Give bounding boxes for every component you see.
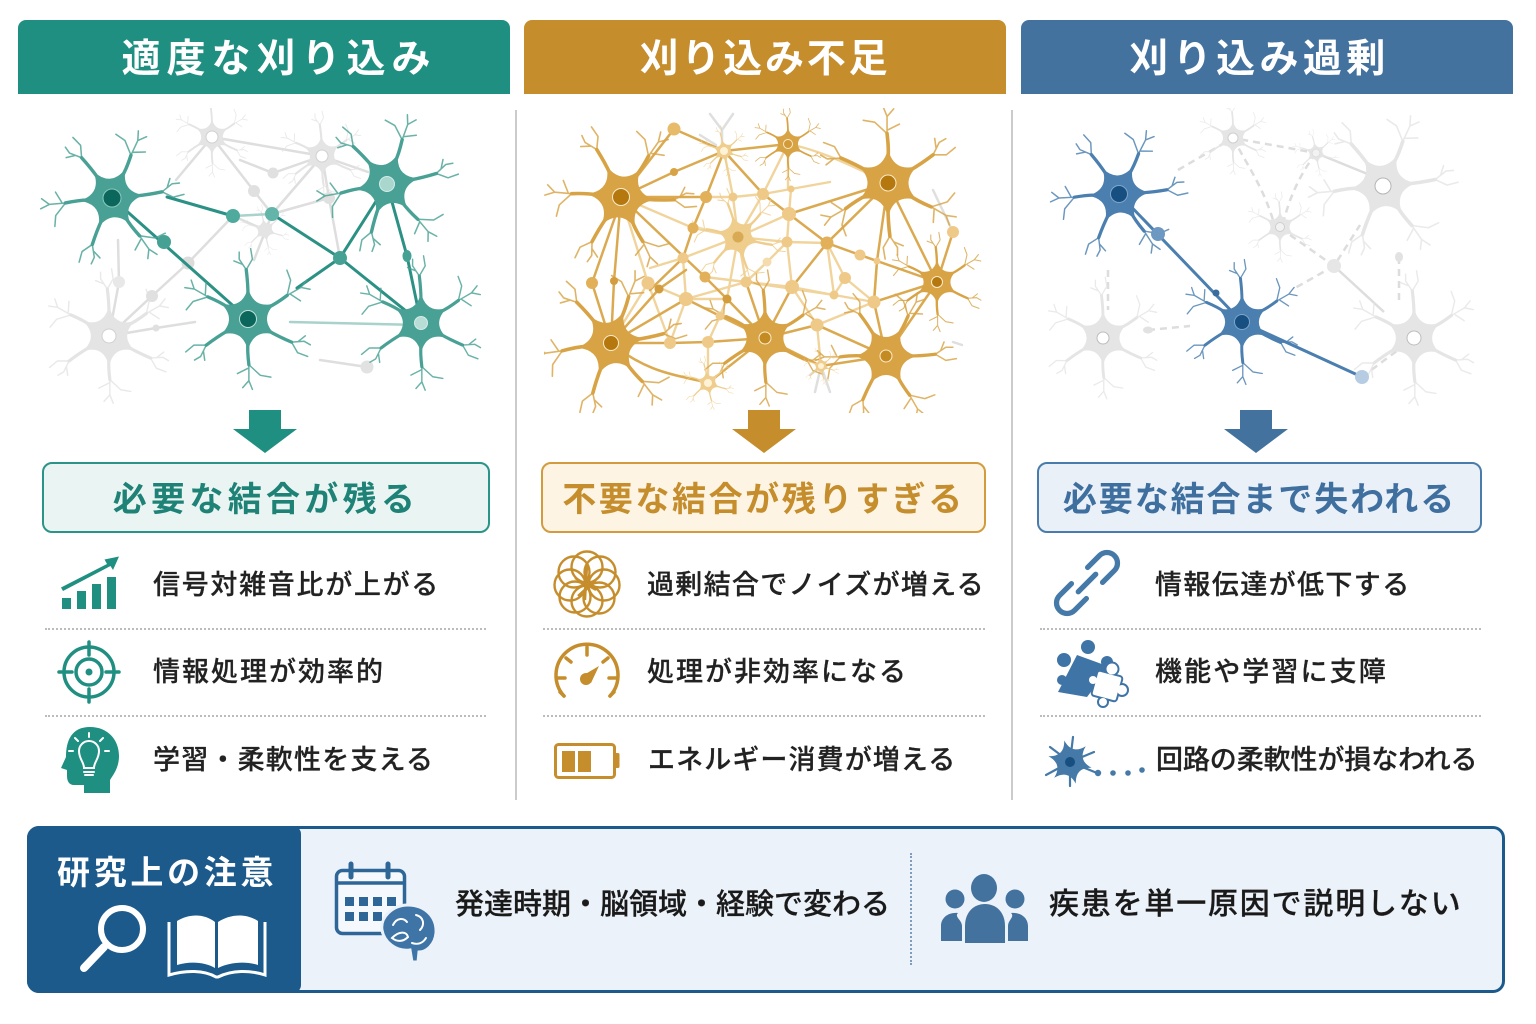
icon: people (941, 874, 1028, 943)
light neurons (673, 118, 846, 417)
sidebar: research notes (27, 826, 301, 993)
list item: energy (554, 743, 956, 779)
icon: puzzle (1057, 640, 1129, 708)
text: 情報処理が効率的 (153, 657, 385, 687)
connection nodes (586, 122, 959, 349)
text: 学習・柔軟性を支える (153, 745, 434, 775)
icon: magnifier and book (80, 905, 266, 978)
icon: target (57, 640, 121, 704)
arrow down (233, 410, 297, 453)
text: 信号対雑音比が上がる (153, 570, 440, 600)
text: 機能や学習に支障 (1155, 657, 1388, 687)
neurons (525, 77, 1005, 429)
text: 回路の柔軟性が損なわれる (1156, 745, 1477, 775)
neural network: balanced connections (40, 108, 482, 404)
panel: appropriate pruning (18, 20, 510, 793)
list item: inefficient processing (554, 642, 908, 698)
text: 情報伝達が低下する (1155, 570, 1411, 600)
active neurons (1047, 120, 1369, 405)
heading: appropriate pruning (18, 20, 510, 94)
panel: research notes (27, 826, 1505, 993)
icon: calendar and brain (334, 862, 435, 960)
item: developmental stage (334, 862, 890, 960)
list item: signal to noise (61, 556, 440, 609)
inactive connections (109, 137, 368, 367)
inactive neurons (18, 81, 383, 426)
result banner (42, 462, 490, 533)
icon: neuron with broken axon (1044, 736, 1145, 788)
text: 疾患を単一原因で説明しない (1049, 888, 1462, 921)
panel: excessive pruning (1021, 20, 1513, 788)
active neurons (34, 99, 514, 413)
light connections (611, 144, 888, 383)
icon: tangled circles (553, 550, 621, 618)
heading: insufficient pruning (524, 20, 1006, 94)
text: 発達時期・脳領域・経験で変わる (455, 889, 890, 921)
result banner: 必要な結合まで失われる (1063, 481, 1456, 519)
icon: broken chain (1054, 550, 1120, 616)
icon: head with light bulb (61, 727, 119, 793)
text: エネルギー消費が増える (648, 745, 956, 775)
neural network: lost connections (1048, 108, 1474, 406)
active connections (112, 184, 421, 325)
icon: battery (554, 743, 620, 779)
list item: noise (553, 550, 985, 618)
text: 過剰結合でノイズが増える (647, 570, 985, 600)
heading: insufficient pruning: 刈り込み不足 (640, 38, 890, 81)
list item: transmission (1054, 550, 1411, 616)
heading: appropriate pruning: 適度な刈り込み (121, 38, 436, 81)
list item: learning (61, 727, 434, 793)
list item: function (1057, 640, 1388, 708)
result banner: 必要な結合が残る (113, 481, 419, 519)
faint gray branches (700, 114, 962, 392)
inactive neurons (1021, 87, 1507, 428)
heading: excessive pruning: 刈り込み過剰 (1129, 38, 1390, 81)
sidebar title: 研究上の注意 (57, 854, 277, 891)
text: 処理が非効率になる (647, 657, 908, 687)
item: single cause (941, 874, 1462, 943)
list item: efficient processing (57, 640, 385, 704)
icon: rising bar chart (61, 556, 119, 609)
arrow down (1224, 410, 1288, 453)
neural network: excess connections (544, 108, 982, 413)
heading: excessive pruning (1021, 20, 1513, 94)
surviving connections (1119, 194, 1362, 377)
arrow down (732, 410, 796, 453)
result banner (541, 462, 986, 533)
dark connections (592, 129, 953, 383)
list item: flexibility (1044, 736, 1477, 788)
result banner (1037, 462, 1482, 533)
icon: speedometer (554, 642, 620, 698)
weakened dashed connections (1108, 138, 1414, 377)
panel: insufficient pruning (524, 20, 1006, 779)
result banner: 不要な結合が残りすぎる (562, 481, 965, 519)
